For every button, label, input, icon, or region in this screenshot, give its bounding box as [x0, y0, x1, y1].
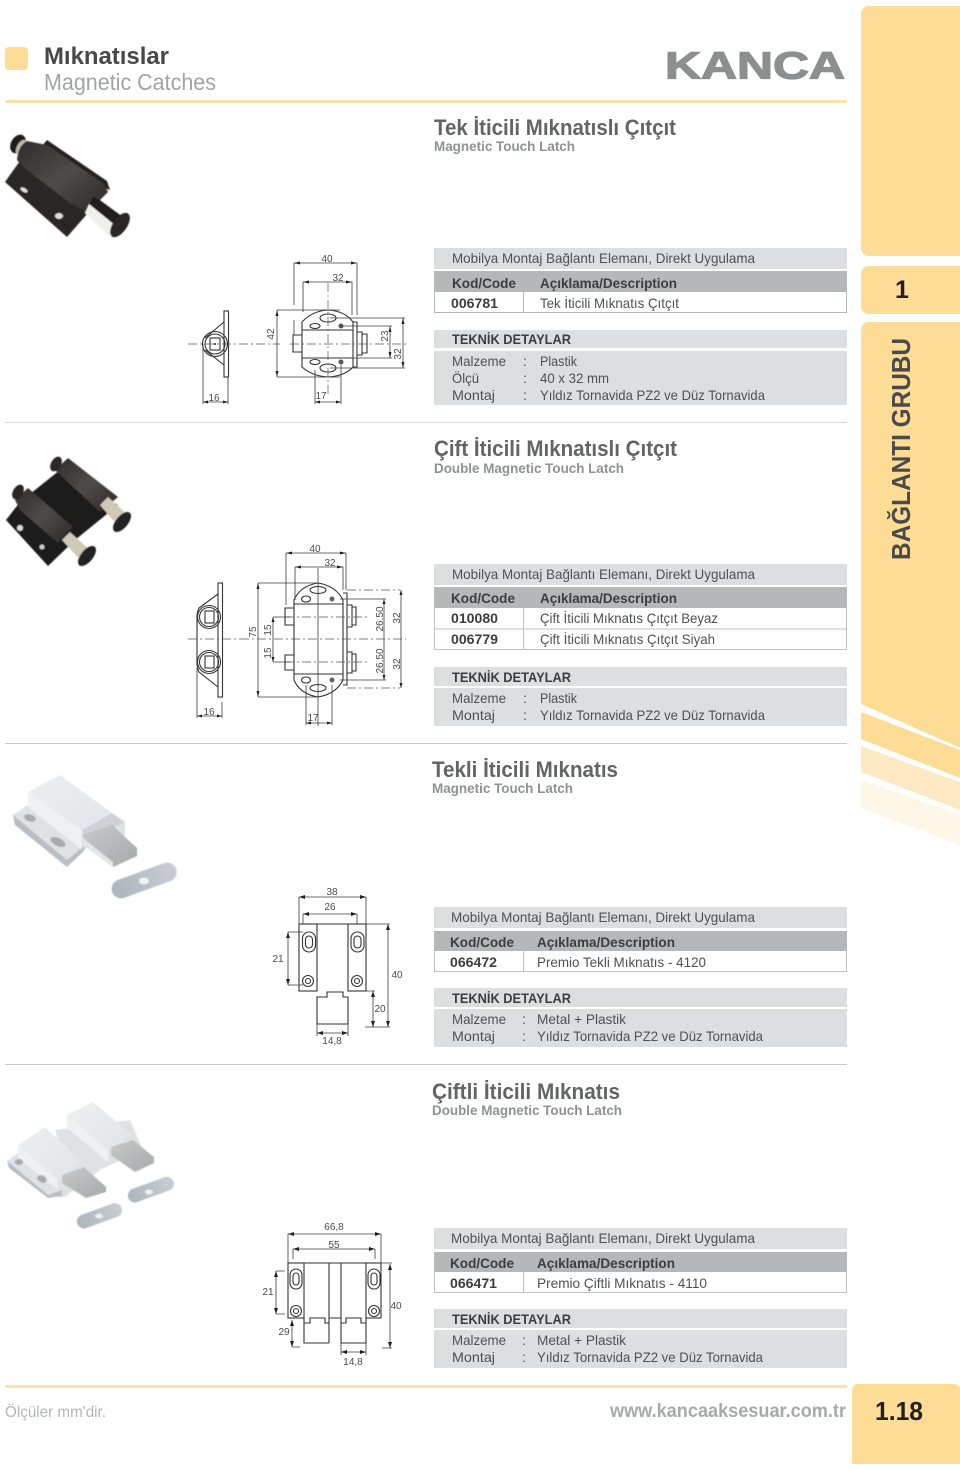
section 3 product info table [434, 907, 847, 972]
section 2 technical details [434, 667, 847, 726]
section 4 heading: Double Magnetic Touch Latch [432, 1102, 622, 1118]
section 4 technical details: Malzeme [452, 1332, 506, 1348]
section 4 technical details: Yıldız Tornavida PZ2 ve Düz Tornavida [537, 1349, 763, 1365]
section 4 technical details: : [522, 1332, 526, 1348]
section 1 heading [434, 115, 677, 154]
footer website: www.kancaaksesuar.com.tr [609, 1401, 847, 1422]
section 4 product info table: Kod/Code [450, 1255, 514, 1271]
section 4 technical drawing: 14,8 [343, 1357, 363, 1368]
section 1 product info table: Mobilya Montaj Bağlantı Elemanı, Direkt Uygulama [452, 250, 755, 266]
section 1 technical details [434, 330, 847, 405]
side view [188, 583, 240, 718]
section 2 heading [434, 436, 678, 476]
section 3 photo: white latch [13, 775, 179, 901]
section 4 heading [432, 1079, 622, 1118]
front view: 40 [321, 254, 333, 265]
section 1 technical details: Plastik [540, 353, 578, 369]
section 1 product info table: 006781 [451, 295, 498, 311]
front view [266, 254, 406, 404]
section 1 heading: Tek İticili Mıknatıslı Çıtçıt [434, 115, 677, 140]
section 2 technical details: : [523, 690, 527, 706]
section 3 technical details: TEKNİK DETAYLAR [452, 990, 571, 1006]
section 2 photo: black double latch [6, 455, 134, 569]
section 2 heading: Double Magnetic Touch Latch [434, 460, 624, 476]
front view: 26.50 [375, 648, 386, 674]
front view: 32 [392, 612, 403, 624]
section 2 product info table: Çift İticili Mıknatıs Çıtçıt Beyaz [540, 609, 718, 626]
front view [240, 544, 406, 726]
section 2 technical drawing [188, 544, 406, 726]
section 3 technical drawing: 21 [272, 954, 284, 965]
section 3 product info table: Açıklama/Description [537, 934, 675, 950]
section 3 technical details: Montaj [452, 1028, 495, 1044]
section 3 technical drawing: 20 [374, 1004, 386, 1015]
section 1 photo: black latch [5, 132, 134, 240]
page title [44, 43, 216, 95]
section 3 product info table: Kod/Code [450, 934, 514, 950]
footer note: Ölçüler mm'dir. [5, 1403, 106, 1421]
section 1 technical details: : [523, 353, 527, 369]
front view: 15 [263, 624, 274, 636]
section 1 product info table: Tek İticili Mıknatıs Çıtçıt [540, 294, 679, 311]
side view: 16 [208, 393, 220, 404]
front view: 26.50 [375, 606, 386, 632]
section 2 product info table: 010080 [451, 610, 498, 626]
section 1 technical details: Yıldız Tornavida PZ2 ve Düz Tornavida [540, 387, 765, 403]
sidebar fading stripes [861, 712, 960, 845]
sidebar chapter number tab: 1 [895, 276, 909, 304]
sidebar top tab [861, 6, 960, 256]
section 3 product info table: Premio Tekli Mıknatıs - 4120 [537, 954, 706, 970]
section 4 product info table: 066471 [450, 1275, 497, 1291]
section 3 technical details: Metal + Plastik [537, 1011, 627, 1027]
section 1 heading: Magnetic Touch Latch [434, 138, 575, 154]
section 1 technical details: : [523, 370, 527, 386]
front view: 23 [380, 330, 391, 342]
front view: 17 [307, 713, 319, 724]
section 1 technical details: Malzeme [452, 353, 506, 369]
section 2 product info table: Çift İticili Mıknatıs Çıtçıt Siyah [540, 630, 715, 647]
section 2 product info table: Mobilya Montaj Bağlantı Elemanı, Direkt Uygulama [452, 566, 755, 582]
front view: 32 [392, 658, 403, 670]
section 3 technical details: Malzeme [452, 1011, 506, 1027]
section 2 technical details: Yıldız Tornavida PZ2 ve Düz Tornavida [540, 707, 765, 723]
section 1 technical details: : [523, 387, 527, 403]
section 2 technical details: : [523, 707, 527, 723]
section 2 product info table: Açıklama/Description [540, 590, 677, 606]
front view: 32 [393, 348, 404, 360]
section 4 product info table: Mobilya Montaj Bağlantı Elemanı, Direkt Uygulama [451, 1230, 755, 1246]
section 4 technical drawing: 55 [328, 1240, 340, 1251]
section 3 heading: Magnetic Touch Latch [432, 780, 573, 796]
section 4 product info table: Açıklama/Description [537, 1255, 675, 1271]
section 3 technical drawing: 38 [326, 887, 338, 898]
front view: 42 [266, 328, 277, 340]
section 4 product info table: Premio Çiftli Mıknatıs - 4110 [537, 1275, 707, 1291]
section 1 technical details: Montaj [452, 387, 495, 403]
section 4 technical details: Montaj [452, 1349, 495, 1365]
section 4 technical details: : [522, 1349, 526, 1365]
front view: 17 [315, 391, 327, 402]
section 3 technical drawing [272, 887, 403, 1047]
section 1 product info table [434, 248, 847, 312]
section 3 product info table: 066472 [450, 954, 497, 970]
page number tab [852, 1384, 960, 1464]
section 3 product info table: Mobilya Montaj Bağlantı Elemanı, Direkt Uygulama [451, 909, 755, 925]
section 3 technical details: Yıldız Tornavida PZ2 ve Düz Tornavida [537, 1028, 763, 1044]
section 4 technical drawing: 29 [278, 1327, 290, 1338]
section 3 technical drawing: 40 [391, 970, 403, 981]
page title: Mıknatıslar [44, 43, 169, 70]
section 4 technical drawing: 66,8 [324, 1222, 344, 1233]
section 2 technical details: Malzeme [452, 690, 506, 706]
header marker square [5, 47, 28, 70]
section 3 technical details: : [522, 1011, 526, 1027]
sidebar group band [861, 322, 960, 748]
section 4 photo: white double latch [7, 1102, 176, 1230]
section 1 technical details: TEKNİK DETAYLAR [452, 331, 571, 347]
front view: 75 [248, 626, 259, 638]
section 2 heading: Çift İticili Mıknatıslı Çıtçıt [434, 436, 678, 461]
section 3 technical details: : [522, 1028, 526, 1044]
section 4 technical details [434, 1309, 847, 1368]
section 2 technical details: TEKNİK DETAYLAR [452, 669, 571, 685]
page title: Magnetic Catches [44, 69, 216, 95]
sidebar chapter number tab [861, 266, 960, 314]
section 4 product info table [434, 1228, 847, 1292]
section 2 product info table: 006779 [451, 631, 498, 647]
section 4 technical drawing: 21 [262, 1287, 274, 1298]
section 2 technical details: Plastik [540, 690, 578, 706]
sidebar group band: BAĞLANTI GRUBU [886, 338, 916, 560]
section 1 technical details: 40 x 32 mm [540, 370, 609, 386]
side view: 16 [203, 707, 215, 718]
front view: 40 [309, 544, 321, 555]
section 3 heading [432, 757, 618, 796]
page number tab: 1.18 [875, 1396, 923, 1426]
section 3 heading: Tekli İticili Mıknatıs [432, 757, 618, 782]
section 1 technical details: Ölçü [452, 369, 479, 386]
front view: 32 [332, 273, 344, 284]
section 1 technical drawing [188, 254, 406, 404]
front view: 15 [263, 647, 274, 659]
section 3 technical drawing: 14,8 [322, 1036, 342, 1047]
side view [188, 311, 280, 404]
section 4 technical drawing [262, 1222, 402, 1368]
section 3 technical drawing: 26 [324, 902, 336, 913]
section 1 product info table: Kod/Code [452, 275, 516, 291]
section 2 technical details: Montaj [452, 707, 495, 723]
section 3 technical details [434, 988, 847, 1047]
section 4 technical drawing: 40 [390, 1301, 402, 1312]
section 4 technical details: TEKNİK DETAYLAR [452, 1311, 571, 1327]
section 4 technical details: Metal + Plastik [537, 1332, 627, 1348]
section 2 product info table [434, 564, 847, 650]
front view: 32 [324, 558, 336, 569]
logo: KANCA: KANCA [665, 46, 845, 88]
section 1 product info table: Açıklama/Description [540, 275, 677, 291]
section 2 product info table: Kod/Code [451, 590, 515, 606]
section 4 heading: Çiftli İticili Mıknatıs [432, 1079, 620, 1104]
